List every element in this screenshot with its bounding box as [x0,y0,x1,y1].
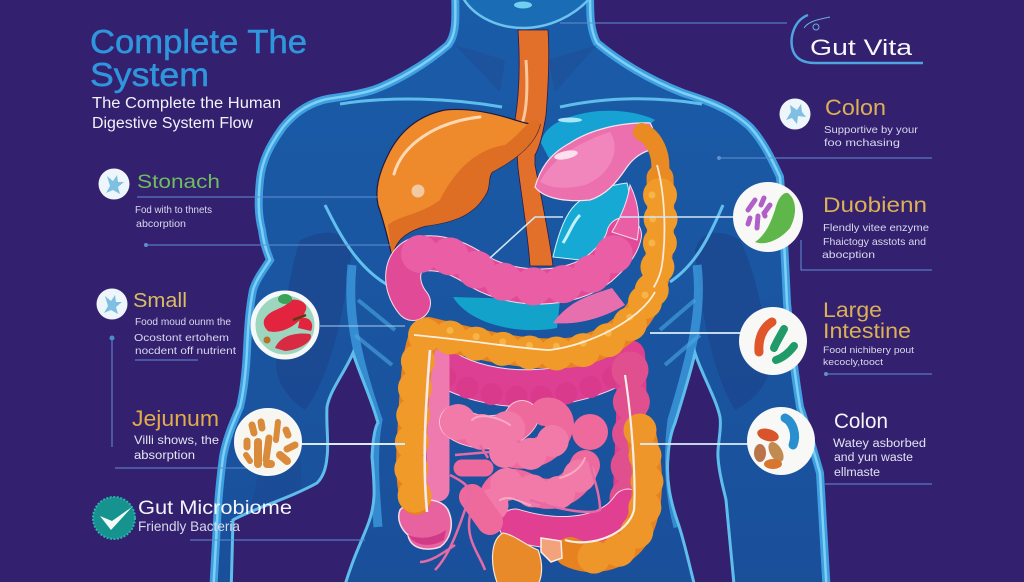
label: colon top: Colon [825,95,886,120]
label: jejunum [132,406,219,462]
label: small: Ocostont ertohem [134,332,229,344]
cecum [399,500,451,549]
right pointer lines [560,23,932,484]
chin [463,0,590,28]
label: colon bottom: ellmaste [834,467,880,479]
icon: gut microbiome badge [93,497,135,539]
label: gut microbiome: Friendly Bacteria [138,518,240,534]
label: stomach: Fod with to thnets [135,204,212,216]
label: small: nocdent off nutrient [135,345,236,357]
pink small segment [553,288,625,323]
cyan organ lower [553,183,629,260]
label: large intestine: Large [823,299,882,322]
label: colon top: Supportive by your [824,124,919,136]
torso side bands [351,265,378,527]
label: small: Food moud ounm the [135,316,231,328]
esophagus [515,30,553,266]
label: colon bottom: Colon [834,410,888,433]
gap between left arm and torso [231,353,378,582]
transverse orange colon [411,302,645,500]
label: jejunum: Jejunum [132,406,219,431]
label: colon bottom: Watey asborbed [833,438,926,450]
icon: orange bacteria circle [235,409,301,475]
label: large intestine [823,299,914,368]
title: System [90,56,209,93]
lower orange lump [493,533,542,582]
small intestine loops [456,412,608,522]
icon: large intestine circle [739,307,807,375]
icon: colon circle [747,407,815,475]
label: duodenum: Fhaictogy asstots and [823,236,926,248]
icon: duodenum circle [733,182,803,252]
arm shading [276,233,352,410]
title [90,23,307,132]
title: Complete The [90,23,307,60]
icon: stomach badge [98,168,130,200]
cyan organ upper [541,111,655,170]
mesentery branches [420,445,600,570]
label: colon top: foo mchasing [824,137,900,149]
label: stomach: abcorption [136,218,186,230]
liver stomach orange [377,109,540,256]
icon: small intestine badge [96,288,128,320]
title: The Complete the Human [92,95,281,112]
pointer line to intestine [490,217,733,258]
logo: Gut Vita [792,15,923,63]
label: small: Small [133,290,187,312]
label: large intestine: Intestine [823,320,911,343]
organs: digestive tract [377,30,733,582]
logo: Gut Vita: Gut Vita [810,35,913,60]
left pointer lines [110,197,405,540]
stomach pink [535,123,654,201]
label: jejunum: Villi shows, the [134,433,219,447]
label: duodenum: Flendly vitee enzyme [823,222,929,234]
icon: food circle [253,293,317,357]
label: colon top [824,95,919,149]
label: duodenum: abocption [822,249,875,261]
label: large intestine: Food nichibery pout [823,345,914,356]
descending orange tube [642,132,660,172]
title: Digestive System Flow [92,115,254,132]
cyan crescent [453,297,560,330]
label: colon bottom [833,410,926,479]
large intestine pink [445,362,625,388]
label: large intestine: kecocly,tooct [823,357,883,368]
label: duodenum [822,194,929,261]
collarbones and chest lines [340,99,702,107]
label: stomach: Stonach [137,171,220,193]
upper pink intestine [403,235,624,303]
human body silhouette [213,0,827,582]
label: duodenum: Duobienn [823,194,927,217]
label: gut microbiome [138,498,292,534]
label: jejunum: absorption [134,450,195,462]
gap between right arm and torso [667,353,735,582]
icon: colon badge [780,98,810,130]
label: gut microbiome: Gut Microbiome [138,498,292,519]
label: stomach [135,171,220,230]
label: small [133,290,236,357]
label: colon bottom: and yun waste [834,452,913,464]
